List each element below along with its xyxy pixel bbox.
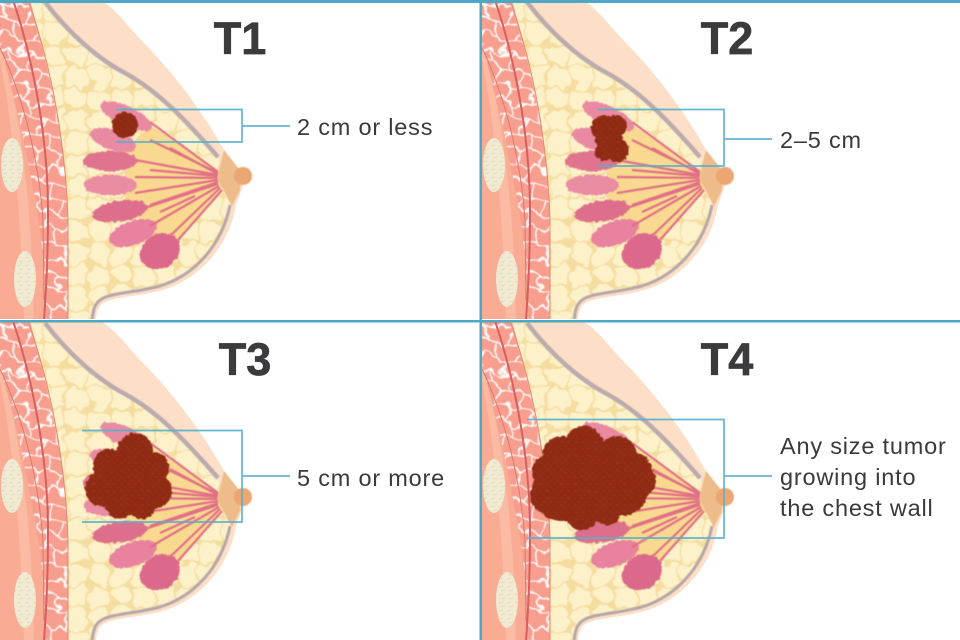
label: 2–5 cm: 2–5 cm <box>780 127 862 153</box>
size bracket: T2 <box>598 110 772 166</box>
label: chest wall growth: the chest wall <box>780 495 934 521</box>
label: chest wall growth: Any size tumor <box>780 433 947 459</box>
tumor: T3 <box>85 433 172 519</box>
panel: T1 <box>0 0 433 330</box>
heading: T3: T3 <box>219 334 271 385</box>
heading: T2: T2 <box>701 13 753 64</box>
panel: T4 <box>472 311 947 640</box>
label: chest wall growth <box>780 433 947 521</box>
illustration: T3 breast anatomy <box>0 311 252 640</box>
size bracket: T4 <box>527 420 772 538</box>
tumor: T4 <box>530 426 656 530</box>
illustration: T4 breast anatomy <box>472 311 734 640</box>
tumor: T1 <box>112 112 138 138</box>
size bracket: T3 <box>82 430 290 522</box>
tumor: T2 <box>591 115 629 162</box>
panel: T2 <box>472 0 862 330</box>
label: 2 cm or less: 2 cm or less <box>297 114 433 140</box>
panel: T3 <box>0 311 445 640</box>
label: chest wall growth: growing into <box>780 464 916 490</box>
heading: T4: T4 <box>701 334 753 385</box>
illustration: T2 breast anatomy <box>472 0 734 330</box>
heading: T1: T1 <box>214 13 266 64</box>
illustration: T1 breast anatomy <box>0 0 252 330</box>
size bracket: T1 <box>116 110 290 142</box>
label: 5 cm or more: 5 cm or more <box>297 465 445 491</box>
